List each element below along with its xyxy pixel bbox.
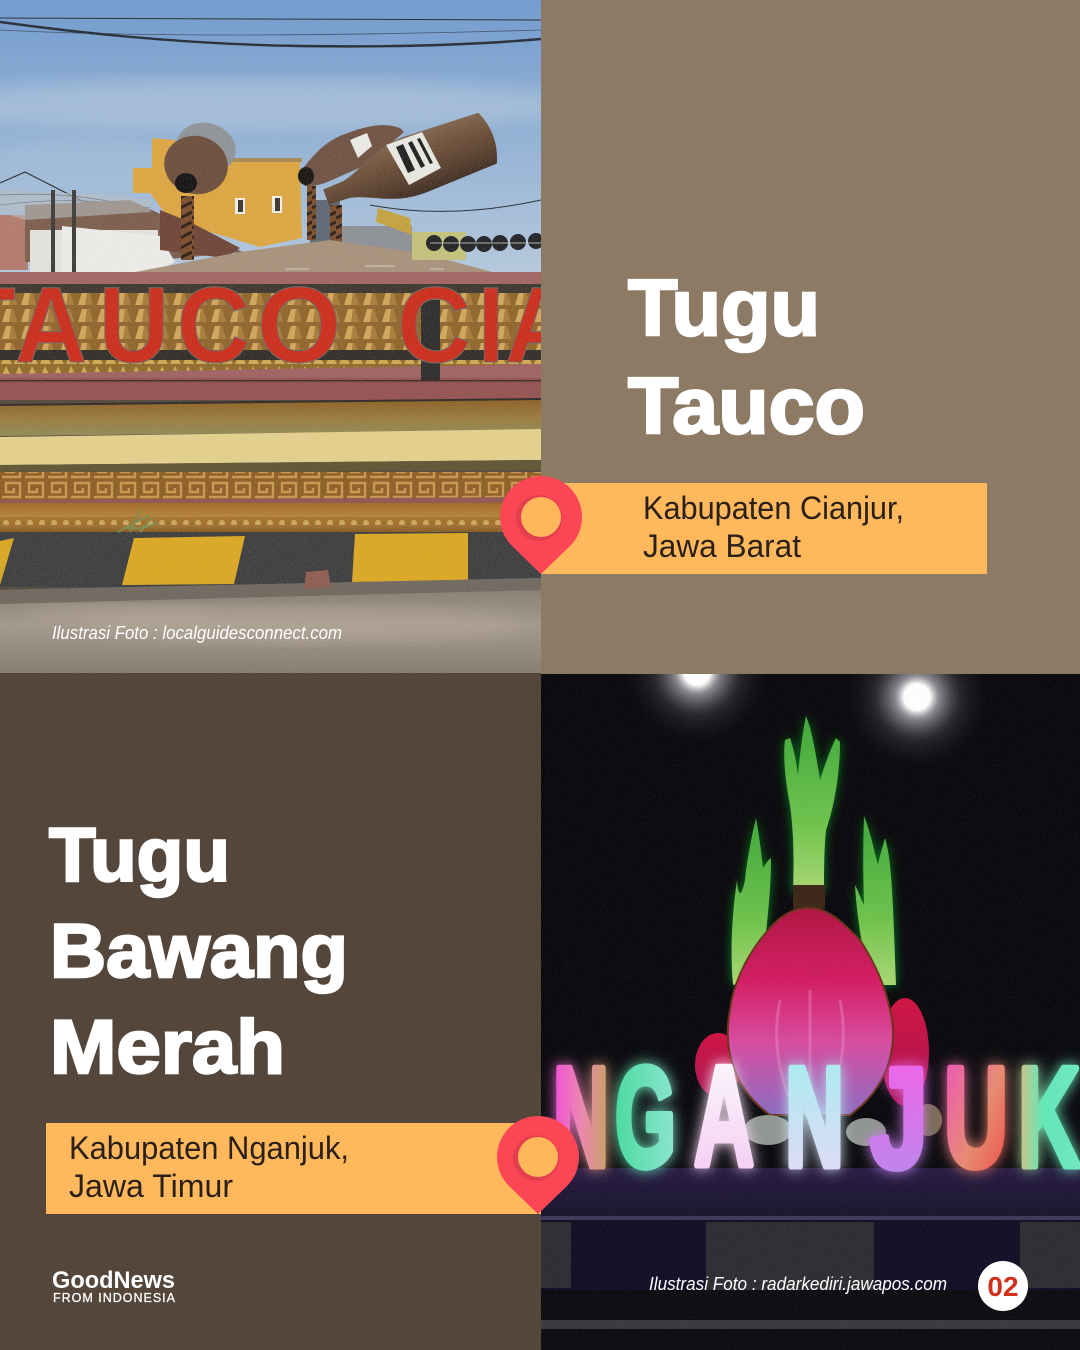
bottle on the left (164, 122, 236, 260)
title: Tugu Tauco (628, 263, 865, 450)
illuminated letters NGANJUK: G (615, 1038, 676, 1197)
photo credit top: Ilustrasi Foto : localguidesconnect.com (52, 623, 342, 643)
rock on the road (304, 570, 331, 589)
page number: 02 (987, 1271, 1019, 1302)
logo: GoodNews from Indonesia: FROM INDONESIA (53, 1291, 176, 1305)
location text: Nganjuk: Kabupaten Nganjuk, (69, 1130, 349, 1166)
illuminated letters NGANJUK: N (553, 1038, 609, 1197)
logo: GoodNews from Indonesia: GoodNews (52, 1267, 175, 1294)
title: Tugu Tauco: Tauco (628, 361, 865, 450)
red letters TAUCO CIA: A (15, 264, 87, 385)
street lamps (638, 674, 976, 756)
location text: Cianjur (643, 490, 904, 564)
monument wall (0, 272, 541, 284)
onion bulb (728, 908, 893, 1115)
location bar: Nganjuk (46, 1123, 541, 1214)
red letters TAUCO CIA: I (478, 264, 504, 385)
illuminated letters NGANJUK: A (694, 1037, 754, 1196)
grass tuft (118, 510, 158, 532)
location text: Nganjuk: Jawa Timur (69, 1168, 233, 1204)
photo: Tugu Tauco monument (0, 0, 580, 673)
red letters TAUCO CIA: O (257, 264, 341, 385)
page number (978, 1261, 1028, 1311)
title: Tugu Bawang Merah (49, 813, 348, 1090)
striped curb (0, 532, 541, 587)
location text: Cianjur: Jawa Barat (643, 528, 801, 564)
title: Tugu Bawang Merah: Merah (50, 1005, 285, 1090)
location text: Nganjuk (69, 1130, 349, 1204)
onion side lobes (695, 998, 929, 1106)
monument base (541, 1168, 1080, 1218)
illuminated letters NGANJUK (544, 1052, 1080, 1182)
yellow building (133, 138, 302, 247)
onion leaves (732, 716, 896, 985)
title: Tugu Bawang Merah: Bawang (50, 909, 348, 994)
title: Tugu Tauco: Tugu (628, 263, 820, 352)
red letters TAUCO CIA: C (397, 264, 471, 385)
panel: colour background top right (541, 0, 1080, 674)
flower bed (744, 1104, 942, 1146)
illuminated letters NGANJUK: N (785, 1038, 844, 1197)
red letters TAUCO CIA: A (505, 264, 577, 385)
street signs (376, 208, 544, 260)
red letters TAUCO CIA: U (99, 264, 169, 385)
panel: colour background bottom left (0, 673, 541, 1350)
illuminated letters NGANJUK: U (944, 1038, 1008, 1197)
illuminated letters NGANJUK: J (870, 1039, 928, 1198)
photo: Tugu Bawang Merah monument (541, 600, 1080, 1350)
red letters TAUCO CIA (0, 286, 541, 364)
icon: map pin bottom (497, 1116, 579, 1214)
title: Tugu Bawang Merah: Tugu (49, 813, 230, 898)
mound (136, 240, 492, 272)
photo credit bottom: Ilustrasi Foto : radarkediri.jawapos.com (649, 1274, 947, 1294)
bottles on the right (298, 112, 498, 242)
location text: Cianjur: Kabupaten Cianjur, (643, 490, 904, 526)
red letters TAUCO CIA: C (177, 264, 250, 385)
location bar: Cianjur (541, 483, 987, 574)
icon: map pin top (500, 476, 582, 574)
